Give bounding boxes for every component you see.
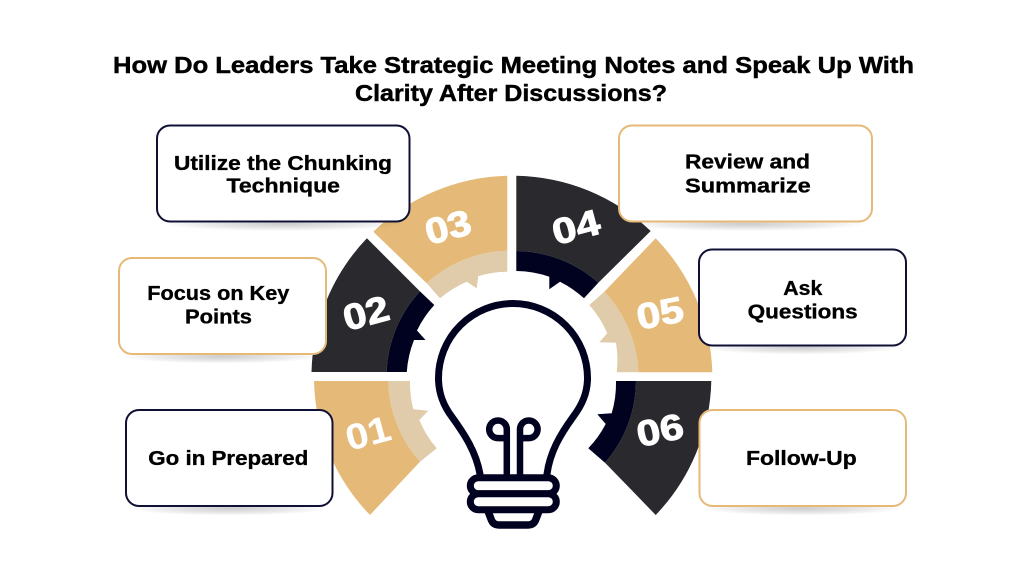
segment 05: 05 xyxy=(633,288,687,338)
segment 06 xyxy=(588,381,711,515)
segment 04 xyxy=(516,176,651,298)
callout: Review and Summarize: Review and xyxy=(685,150,810,173)
segment 02: 02 xyxy=(338,287,394,339)
segment 03 xyxy=(373,176,507,298)
callout: Focus on Key Points: Points xyxy=(185,305,252,328)
segment 03: 03 xyxy=(420,201,476,253)
title: Clarity After Discussions? xyxy=(355,80,667,106)
callout: Review and Summarize: Summarize xyxy=(685,174,811,197)
segment 05 xyxy=(589,238,712,372)
segment 01 xyxy=(314,381,437,515)
callout: Focus on Key Points: Focus on Key xyxy=(147,282,290,305)
segment 06: 06 xyxy=(633,405,687,455)
segment 04: 04 xyxy=(548,201,604,253)
callout: Utilize the Chunking Technique: Utilize the Chunking xyxy=(174,152,392,175)
callout: Ask Questions xyxy=(699,250,906,354)
callout: Focus on Key Points xyxy=(119,258,326,364)
callout: Go in Prepared xyxy=(126,410,332,516)
callout: Follow-Up: Follow-Up xyxy=(746,447,857,470)
callout: Review and Summarize xyxy=(619,126,872,231)
callout: Ask Questions: Ask xyxy=(783,277,823,300)
segment 02 xyxy=(312,238,434,372)
callout: Ask Questions: Questions xyxy=(748,300,858,323)
callout: Go in Prepared: Go in Prepared xyxy=(148,447,308,470)
title: How Do Leaders Take Strategic Meeting Notes and Speak Up With xyxy=(113,52,914,78)
segment 01: 01 xyxy=(341,407,395,459)
callout: Utilize the Chunking Technique xyxy=(157,126,410,231)
callout: Utilize the Chunking Technique: Technique xyxy=(226,175,340,198)
title xyxy=(113,52,914,106)
icon: light bulb xyxy=(438,304,588,525)
callout: Follow-Up xyxy=(700,410,906,516)
